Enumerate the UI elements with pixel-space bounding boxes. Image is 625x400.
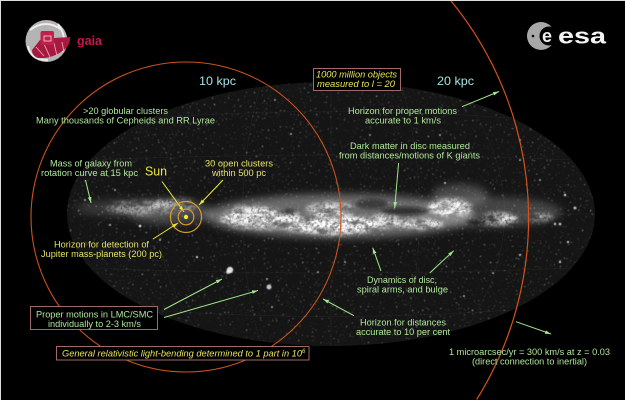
text: horizon for distances: Horizon for distances bbox=[360, 318, 446, 328]
callout: proper motions in LMC/SMC bbox=[30, 306, 158, 330]
callout: 1000 million objects bbox=[314, 68, 400, 90]
text: Jupiter mass planets bbox=[41, 240, 162, 259]
arrow: Sun bbox=[162, 182, 184, 212]
callout: light bending: 6 bbox=[302, 349, 306, 355]
text: dynamics of disc: Dynamics of disc, bbox=[367, 275, 437, 285]
arrow: Jupiter horizon bbox=[153, 223, 178, 239]
arrow: mass of galaxy bbox=[86, 180, 91, 203]
icon: gaia logo bbox=[26, 20, 103, 62]
arrow: distance horizon bbox=[323, 299, 354, 316]
text: globular clusters: Many thousands of Cepheids and RR Lyrae bbox=[36, 116, 215, 126]
arrow: dynamics left bbox=[373, 248, 381, 271]
text: globular clusters bbox=[36, 106, 215, 126]
callout: light bending bbox=[56, 346, 309, 360]
icon: gaia logo: gaia bbox=[77, 33, 103, 48]
text: dark matter: Dark matter in disc measured bbox=[350, 141, 470, 151]
text: horizon for distances: accurate to 10 per cent bbox=[356, 327, 451, 337]
icon: esa logo bbox=[527, 22, 607, 50]
callout: light bending: General relativistic light-bending determined to 1 part in 10 bbox=[62, 348, 302, 358]
callout: proper motions in LMC/SMC: individually to 2-3 km/s bbox=[48, 319, 142, 329]
callout: 1000 million objects: measured to l = 20 bbox=[317, 79, 395, 89]
label: 10 kpc: 10 kpc bbox=[199, 74, 236, 88]
icon: esa logo: e bbox=[542, 26, 552, 46]
circle: 10 kpc horizon bbox=[31, 62, 341, 372]
text: Jupiter mass planets: Jupiter mass-planets (200 pc) bbox=[41, 249, 162, 259]
text: horizon for proper motions bbox=[348, 106, 458, 126]
text: dark matter bbox=[339, 141, 481, 160]
text: globular clusters: >20 globular clusters bbox=[83, 106, 168, 116]
text: microarcsec per year: (direct connection to inertial) bbox=[472, 356, 587, 366]
callout: 1000 million objects: 1000 million objects bbox=[316, 70, 398, 80]
label: 20 kpc: 20 kpc bbox=[437, 74, 474, 88]
arrow: proper motion horizon bbox=[462, 92, 499, 107]
text: open clusters: within 500 pc bbox=[211, 168, 266, 178]
text: Jupiter mass planets: Horizon for detection of bbox=[54, 240, 149, 250]
arrow: dark matter bbox=[395, 163, 399, 208]
icon: Sun position rings bbox=[170, 202, 202, 232]
callout: proper motions in LMC/SMC: Proper motions in LMC/SMC bbox=[36, 310, 153, 320]
text: dark matter: from distances/motions of K giants bbox=[339, 150, 481, 160]
arrow: SMC bbox=[164, 290, 258, 318]
arrow: LMC bbox=[164, 279, 222, 310]
arrow: microarcsec bbox=[516, 322, 551, 334]
text: dynamics of disc: spiral arms, and bulge bbox=[357, 284, 448, 294]
circle: 20 kpc horizon bbox=[450, 0, 529, 400]
text: open clusters: 30 open clusters bbox=[205, 158, 274, 168]
arrow: dynamics right bbox=[430, 251, 454, 273]
arrow: open clusters bbox=[199, 180, 223, 205]
text: dynamics of disc bbox=[357, 275, 448, 294]
label: Sun: Sun bbox=[145, 164, 167, 178]
text: microarcsec per year: 1 microarcsec/yr = 300 km/s at z = 0.03 bbox=[449, 347, 610, 357]
text: open clusters bbox=[205, 158, 274, 178]
text: mass of galaxy bbox=[41, 158, 139, 178]
text: horizon for distances bbox=[356, 318, 451, 337]
text: horizon for proper motions: accurate to 1 km/s bbox=[365, 116, 442, 126]
text: horizon for proper motions: Horizon for proper motions bbox=[348, 106, 458, 116]
text: mass of galaxy: rotation curve at 15 kpc bbox=[41, 168, 139, 178]
text: microarcsec per year bbox=[449, 347, 610, 366]
text: mass of galaxy: Mass of galaxy from bbox=[50, 158, 132, 168]
all-sky map of the Milky Way bbox=[60, 75, 600, 355]
icon: esa logo: esa bbox=[558, 24, 607, 48]
